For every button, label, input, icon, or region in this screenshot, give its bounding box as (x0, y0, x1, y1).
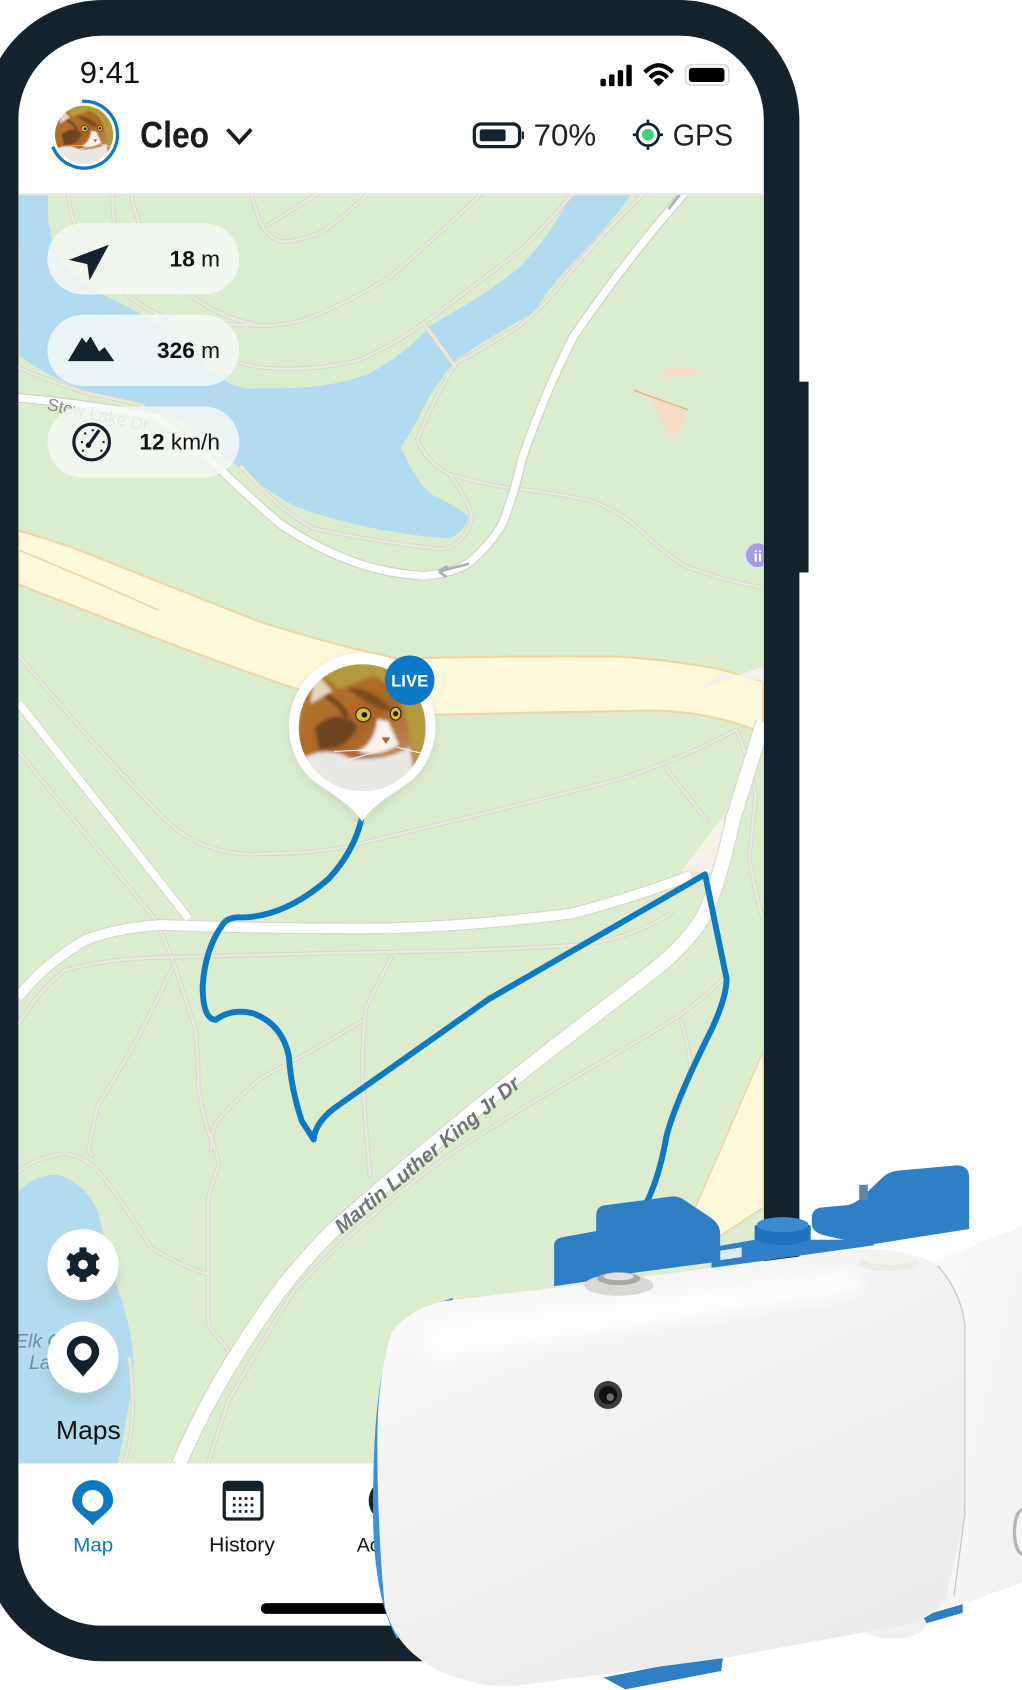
icon: navigation arrow (69, 245, 109, 280)
bottom right blue clip (922, 1604, 963, 1625)
location pin (289, 653, 436, 824)
icon: GPS status (633, 120, 663, 150)
device body (377, 1248, 965, 1686)
pill: speed (47, 406, 239, 478)
highway east side road (681, 666, 763, 873)
label: Stow Lake Dr: Stow Lake Dr (46, 394, 151, 435)
bottom blue clip (604, 1654, 723, 1689)
highway (18, 530, 763, 733)
icon: gear (68, 1247, 98, 1282)
nav: History: History (209, 1534, 275, 1556)
label: Maps: Maps (56, 1417, 121, 1445)
label: Elk Glen Lake: Elk G (15, 1331, 63, 1353)
icon: restroom marker: ii (754, 549, 762, 566)
nav: Activity (357, 1481, 419, 1556)
footpaths (18, 193, 762, 1463)
map top shadow (18, 193, 764, 195)
button: map pin (47, 1322, 119, 1404)
icon: pin (67, 1336, 99, 1377)
home indicator (261, 1603, 477, 1614)
speed value: 12 km/h (139, 430, 220, 455)
icon: battery (474, 124, 524, 147)
clip hardware (859, 1185, 868, 1200)
roads white (18, 703, 763, 1464)
body highlight (426, 1267, 862, 1358)
device right section (925, 1226, 1022, 1615)
blue clip bar (712, 1240, 875, 1268)
nav: Map (72, 1480, 113, 1556)
blue clip tab left (596, 1196, 720, 1276)
blue clip tab right (812, 1165, 969, 1245)
pill: distance (47, 223, 239, 294)
lake: Stow Lake (18, 194, 632, 538)
road east yellow (694, 1050, 764, 1237)
status icons (600, 65, 729, 86)
phone screen (15, 36, 770, 1626)
phone frame (0, 0, 799, 1661)
snap left (584, 1272, 653, 1296)
footpath inner (18, 193, 762, 1463)
button: settings (47, 1229, 119, 1311)
label: Lake: La (29, 1352, 51, 1374)
icon: restroom marker (746, 543, 764, 568)
LIVE badge: LIVE (391, 672, 428, 691)
snap right (859, 1254, 920, 1271)
device bottom bump (859, 1608, 926, 1639)
cat photo (298, 663, 427, 792)
road: Stow Lake Dr (18, 193, 685, 576)
pet name: Cleo (140, 115, 209, 156)
phone side button (792, 382, 809, 572)
GPS track (203, 820, 727, 1202)
avatar ring (53, 101, 117, 168)
lake: Elk Glen Lake (18, 1175, 134, 1464)
GPS label: GPS (673, 120, 733, 153)
LIVE badge (385, 655, 434, 705)
label: Martin Luther King Jr Dr: Martin Luther King Jr Dr (330, 1072, 525, 1238)
blue clip back left (554, 1231, 614, 1286)
altitude value: 326 m (157, 338, 220, 363)
nav: Activity: Activity (357, 1534, 419, 1556)
nav: Map: Map (73, 1534, 113, 1556)
icon: mountains (68, 336, 114, 361)
center dome button (755, 1217, 811, 1245)
nav: History (209, 1482, 275, 1556)
battery level: 70% (534, 120, 596, 153)
icon: speedometer (74, 424, 109, 460)
camera sensor (594, 1381, 622, 1409)
bar slot (720, 1247, 742, 1260)
road arrows (439, 194, 680, 577)
device blue edge (373, 1298, 453, 1639)
orange patch (634, 367, 703, 437)
distance value: 18 m (170, 246, 220, 271)
icon: chevron (227, 129, 251, 142)
side port (1014, 1510, 1022, 1554)
pill: altitude (47, 315, 239, 386)
avatar (53, 101, 117, 168)
GPS tracker device (373, 1165, 1022, 1689)
map (15, 193, 770, 1464)
device seam (938, 1266, 965, 1596)
status time: 9:41 (80, 57, 140, 90)
